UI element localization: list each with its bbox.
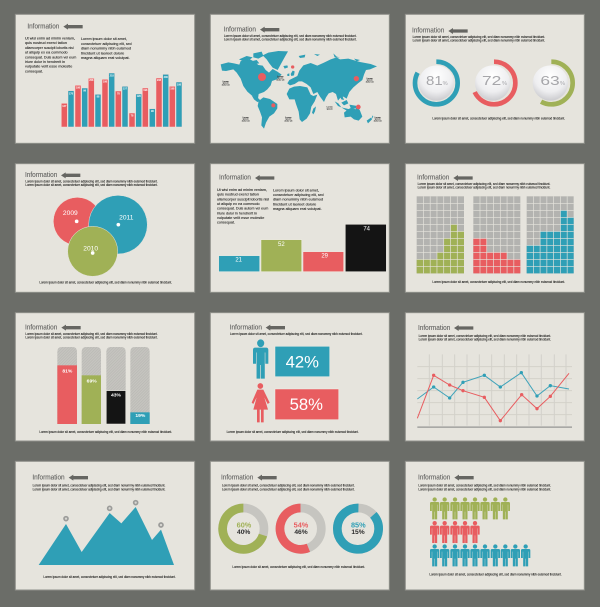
text block: left column: ut aliquip ex ea commodo — [217, 202, 260, 206]
panel: people pictogram — [405, 461, 584, 590]
caption: Lorem ipsum dolor sit amet, consectetuer adipiscing elit, sed diam nonummy nibh euismod tincidunt. — [432, 280, 565, 284]
bar: 29: 29 — [321, 253, 329, 259]
text block: left column: consequat. — [217, 220, 235, 224]
caption: Lorem ipsum dolor sit amet, consectetuer adipiscing elit, sed diam nonummy nibh euismod tincidunt. — [429, 573, 562, 577]
map labels: dolor sit — [276, 79, 285, 82]
text block: Lorem ipsum dolor sit amet, consectetuer adipiscing elit, sed diam nonummy nibh euismod tincidunt. — [418, 182, 550, 186]
map labels: Lorem — [327, 105, 333, 108]
text block: left column: ullamcorper suscipit lobortis nisl — [25, 46, 74, 50]
map labels: ipsum — [277, 78, 283, 80]
panel: four block bars — [210, 164, 389, 292]
text block: left column: vulputate velit esse molestie — [217, 216, 264, 220]
caption: Lorem ipsum dolor sit amet, consectetuer adipiscing elit, sed diam nonummy nibh euismod tincidunt. — [232, 565, 365, 569]
arrow — [448, 28, 468, 34]
bar: 21: 21 — [235, 258, 243, 264]
map labels: ipsum — [243, 119, 249, 121]
heading: Information — [32, 475, 65, 482]
text block: left column: consequat. Duis autem vel eum — [217, 207, 268, 211]
text block: left column: Ut wisi enim ad minim veniam, — [25, 36, 75, 40]
arrow — [266, 325, 285, 331]
panel: line chart — [405, 313, 584, 441]
row: red people — [430, 521, 480, 543]
heading: Information — [221, 475, 253, 482]
ring: 81% — [415, 62, 458, 104]
text block: right column: consectetuer adipiscing elit, sed — [273, 193, 324, 197]
stat box: 42% — [275, 346, 330, 377]
caption: Lorem ipsum dolor sit amet, consectetuer adipiscing elit, sed diam nonummy nibh euismod tincidunt. — [39, 280, 172, 284]
heading: Information — [219, 175, 251, 182]
donut: 54 / 46 — [274, 502, 328, 556]
circle: 2009: 2009 — [63, 210, 78, 217]
map labels: Lorem — [277, 75, 284, 78]
stat box: 42%: 42% — [286, 352, 319, 371]
map labels: ipsum — [223, 83, 229, 85]
text block: left column: ullamcorper suscipit lobortis nisl — [217, 197, 269, 201]
map labels: dolor sit — [366, 81, 374, 84]
panel: gender split — [210, 313, 389, 441]
bar chart: 218 — [110, 75, 114, 78]
circle: 2009 — [53, 197, 101, 245]
panel: bar chart with two text columns — [15, 14, 195, 143]
data markers — [258, 65, 361, 109]
text block: right column: Lorem ipsum dolor sit amet, — [81, 37, 127, 41]
map labels: dolor sit — [284, 120, 293, 123]
heading: Information — [418, 325, 450, 332]
panel: donut charts — [210, 461, 389, 590]
donut: 60 / 40 — [217, 503, 269, 555]
text block: left column: vulputate velit esse molestie — [25, 65, 72, 69]
text block: Lorem ipsum dolor sit amet, consectetuer adipiscing elit, sed diam nonummy nibh euismod tincidunt. — [33, 487, 165, 491]
donut: 85 / 15 — [329, 499, 387, 558]
text block: Lorem ipsum dolor sit amet, consectetuer adipiscing elit, sed diam nonummy nibh euismod tincidunt. — [418, 186, 550, 190]
text block: Lorem ipsum dolor sit amet, consectetuer adipiscing elit, sed diam nonummy nibh euismod tincidunt. — [224, 38, 357, 42]
arrow — [61, 172, 80, 178]
arrow — [255, 175, 274, 181]
grid chart: red — [473, 196, 520, 273]
heading: Information — [224, 26, 256, 33]
map labels: ipsum — [367, 80, 373, 82]
text block: Lorem ipsum dolor sit amet, consectetuer adipiscing elit, sed diam nonummy nibh euismod tincidunt. — [25, 332, 158, 336]
heading: Information — [230, 325, 262, 332]
column: 81% — [57, 347, 77, 424]
text block: Lorem ipsum dolor sit amet, consectetuer adipiscing elit, sed diam nonummy nibh euismod tincidunt. — [418, 487, 551, 491]
heading: Information — [25, 325, 57, 332]
bar chart: 78 — [131, 114, 134, 117]
text block: Lorem ipsum dolor sit amet, consectetuer adipiscing elit, sed diam nonummy nibh euismod tincidunt. — [222, 487, 355, 491]
text block: left column: iriure dolor in hendrerit in — [217, 211, 257, 215]
text block: Lorem ipsum dolor sit amet, consectetuer adipiscing elit, sed diam nonummy nibh euismod tincidunt. — [413, 35, 545, 39]
text block — [222, 484, 355, 491]
ring: 63%: 63 — [540, 73, 560, 88]
circle: 2010: 2010 — [83, 246, 98, 253]
caption: Lorem ipsum dolor sit amet, consectetuer adipiscing elit, sed diam nonummy nibh euismod tincidunt. — [227, 430, 359, 434]
text block: left column: consequat. — [25, 69, 43, 73]
bar chart: 157 — [123, 87, 128, 90]
bar chart: 208 — [89, 79, 94, 82]
heading: Information — [412, 28, 444, 35]
text block — [25, 332, 158, 340]
row: blue people — [430, 544, 530, 566]
bar chart: 88 — [97, 95, 100, 98]
text block: right column: consectetuer adipiscing elit, sed — [81, 42, 132, 46]
donut: 85 / 15: 85% — [351, 520, 366, 529]
text block: left column: quis nostrud exerci tation — [217, 193, 259, 197]
column: 81%: 81% — [62, 368, 73, 374]
bar chart: 99 — [83, 89, 87, 92]
text block: Lorem ipsum dolor sit amet, consectetuer adipiscing elit, sed diam nonummy nibh euismod tincidunt. — [224, 34, 357, 38]
text block: Lorem ipsum dolor sit amet, consectetuer adipiscing elit, sed diam nonummy nibh euismod tincidunt. — [413, 39, 545, 43]
panel: overlapping circles — [15, 164, 195, 292]
ring: 72% — [473, 62, 515, 104]
text block: Lorem ipsum dolor sit amet, consectetuer adipiscing elit, sed diam nonummy nibh euismod tincidunt. — [33, 484, 165, 488]
text block: Lorem ipsum dolor sit amet, consectetuer adipiscing elit, sed diam nonummy nibh euismod tincidunt. — [25, 179, 158, 183]
bar: 52: 52 — [278, 242, 285, 248]
ring: 81%: 81 — [426, 73, 443, 88]
heading: Information — [25, 172, 57, 179]
bar chart: 128 — [137, 95, 141, 98]
text block — [25, 179, 158, 187]
text block — [418, 182, 550, 190]
panel: area peaks — [15, 461, 195, 590]
bar: 74 — [345, 224, 386, 272]
grid chart: blue — [527, 196, 574, 273]
text block: Lorem ipsum dolor sit amet, consectetuer adipiscing elit, sed diam nonummy nibh euismod tincidunt. — [418, 484, 551, 488]
icon: woman — [252, 383, 270, 422]
bar chart: 208 — [164, 76, 168, 79]
text block — [224, 34, 357, 42]
grid chart: green — [417, 196, 464, 273]
text block: right column — [81, 37, 132, 60]
bar chart: 198 — [170, 87, 175, 90]
text block: left column: Ut wisi enim ad minim veniam, — [217, 188, 267, 192]
text block: left column: quis nostrud exerci tation — [25, 41, 67, 45]
arrow — [454, 475, 474, 481]
donut: 60 / 40: 40% — [237, 529, 250, 536]
donut: 54 / 46: 54% — [294, 520, 309, 529]
map labels: Lorem — [367, 77, 373, 80]
heading: Information — [418, 475, 450, 482]
arrow — [61, 325, 81, 331]
map labels: Lorem — [243, 116, 249, 119]
text block: right column: magna aliquam erat volutpat. — [81, 56, 130, 60]
circle: 2011: 2011 — [119, 215, 134, 222]
text block: left column — [217, 188, 269, 224]
map labels: dolor sit — [242, 120, 250, 123]
heading: Information — [27, 24, 59, 31]
panel: percentage columns — [15, 313, 195, 441]
map labels: Lorem — [285, 116, 292, 119]
map labels: ipsum — [285, 119, 291, 121]
text block: right column — [273, 188, 324, 211]
bar: 29 — [303, 252, 344, 272]
bar chart: 78 — [117, 92, 120, 95]
bar chart: 198 — [143, 89, 148, 92]
bar chart — [61, 73, 182, 127]
row: green people — [430, 497, 510, 519]
peak markers — [64, 501, 163, 527]
bar chart: 198 — [76, 87, 81, 90]
text block: Lorem ipsum dolor sit amet, consectetuer adipiscing elit, sed diam nonummy nibh euismod tincidunt. — [25, 183, 158, 187]
panel: unit grid charts — [405, 164, 584, 292]
ring: 63%: % — [560, 81, 565, 87]
map labels: ipsum — [327, 108, 333, 110]
text block: Lorem ipsum dolor sit amet, consectetuer adipiscing elit, sed diam nonummy nibh euismod tincidunt. — [222, 484, 355, 488]
arrow — [63, 24, 83, 30]
column: 19%: 19% — [135, 413, 146, 419]
text block: right column: magna aliquam erat volutpat. — [273, 207, 322, 211]
text block: Lorem ipsum dolor sit amet, consectetuer adipiscing elit, sed diam nonummy nibh euismod tincidunt. — [419, 334, 551, 338]
column: 43%: 43% — [111, 393, 122, 399]
heading: Information — [417, 175, 449, 182]
arrow — [257, 475, 277, 481]
text block — [413, 35, 545, 43]
bar chart: 198 — [177, 83, 182, 86]
bar chart: 198 — [103, 80, 108, 83]
bar chart: 98 — [151, 110, 154, 113]
arrow — [260, 27, 279, 33]
map labels: dolor sit — [222, 84, 230, 87]
line chart — [417, 354, 572, 428]
text block — [419, 334, 551, 342]
donut: 85 / 15: 15% — [351, 529, 365, 536]
text block: right column: Lorem ipsum dolor sit amet, — [273, 188, 319, 192]
world map shapes — [221, 51, 377, 129]
column: 69%: 69% — [87, 378, 97, 384]
circle: 2010 — [68, 226, 118, 276]
donut: 60 / 40: 60% — [237, 520, 252, 529]
map labels: ipsum — [375, 119, 381, 121]
stat box: 58%: 58% — [290, 395, 323, 414]
bar chart: 208 — [157, 79, 162, 82]
bar: 21 — [219, 256, 260, 272]
text block: right column: tincidunt ut laoreet dolore — [81, 51, 124, 55]
map labels: Lorem — [375, 116, 381, 119]
text block: Lorem ipsum dolor sit amet, consectetuer adipiscing elit, sed diam nonummy nibh euismod tincidunt. — [230, 332, 363, 336]
caption: Lorem ipsum dolor sit amet, consectetuer adipiscing elit, sed diam nonummy nibh euismod tincidunt. — [432, 117, 565, 121]
stat box: 58% — [275, 389, 339, 420]
panel: progress rings — [405, 14, 584, 143]
caption: Lorem ipsum dolor sit amet, consectetuer adipiscing elit, sed diam nonummy nibh euismod tincidunt. — [43, 575, 176, 579]
bar chart: 127 — [62, 105, 67, 108]
panel: world map — [210, 14, 389, 143]
arrow — [453, 175, 473, 181]
bar chart: 178 — [69, 93, 74, 96]
bar: 52 — [261, 240, 302, 272]
text block: left column — [25, 36, 76, 73]
ring: 72%: 72 — [482, 73, 501, 88]
text block: right column: tincidunt ut laoreet dolore — [273, 202, 316, 206]
donut: 54 / 46: 46% — [294, 529, 308, 536]
ring: 81%: % — [443, 81, 448, 87]
text block: left column: ut aliquip ex ea commodo — [25, 51, 68, 55]
column: 69% — [82, 347, 101, 424]
text block: right column: diam nonummy nibh euismod — [81, 47, 131, 51]
arrow — [454, 325, 473, 331]
circle: 2011 — [89, 195, 147, 254]
text block: left column: iriure dolor in hendrerit in — [25, 60, 65, 64]
ring: 63% — [530, 62, 573, 104]
text block: left column: consequat. Duis autem vel eum — [25, 55, 76, 59]
ring: 72%: % — [502, 81, 507, 87]
caption: Lorem ipsum dolor sit amet, consectetuer adipiscing elit, sed diam nonummy nibh euismod tincidunt. — [39, 430, 172, 434]
text block — [418, 484, 551, 491]
text block — [33, 484, 165, 491]
icon: man — [253, 339, 268, 379]
text block: Lorem ipsum dolor sit amet, consectetuer adipiscing elit, sed diam nonummy nibh euismod tincidunt. — [419, 338, 551, 342]
bar: 74: 74 — [363, 226, 371, 232]
text block: Lorem ipsum dolor sit amet, consectetuer adipiscing elit, sed diam nonummy nibh euismod tincidunt. — [25, 336, 158, 340]
map labels — [222, 75, 382, 123]
column: 43% — [106, 347, 126, 424]
arrow — [69, 475, 88, 481]
map labels: dolor sit — [374, 120, 382, 123]
area chart — [39, 507, 174, 565]
map labels: Lorem — [223, 80, 229, 83]
text block: right column: diam nonummy nibh euismod — [273, 198, 323, 202]
column: 19% — [130, 347, 150, 424]
